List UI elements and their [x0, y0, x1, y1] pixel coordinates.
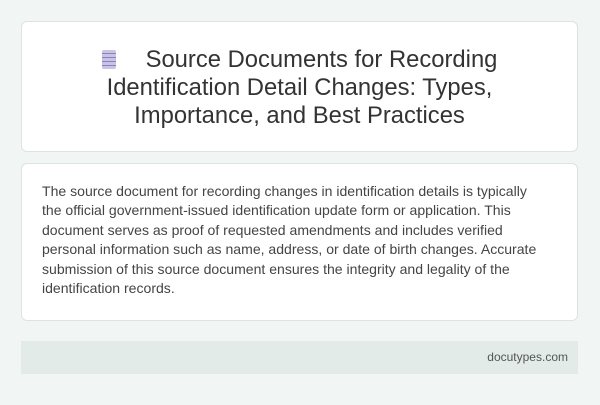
text block: The source document for recording changes in identification details is typically the official government-issued identification update form or application. This document serves as proof of requested amendments and includes verified personal information such as name, address, or date of birth changes. Accurate submission of this source document ensures the integrity and legality of the identification records. [42, 183, 536, 296]
icon: document [102, 50, 116, 69]
footer bar [21, 341, 578, 374]
footer text: docutypes.com [487, 350, 568, 364]
panel: title card [21, 21, 578, 152]
panel: description [21, 163, 578, 321]
title: Source Documents for Recording Identification Detail Changes: Types, Importance, and Best Practices [107, 46, 497, 129]
